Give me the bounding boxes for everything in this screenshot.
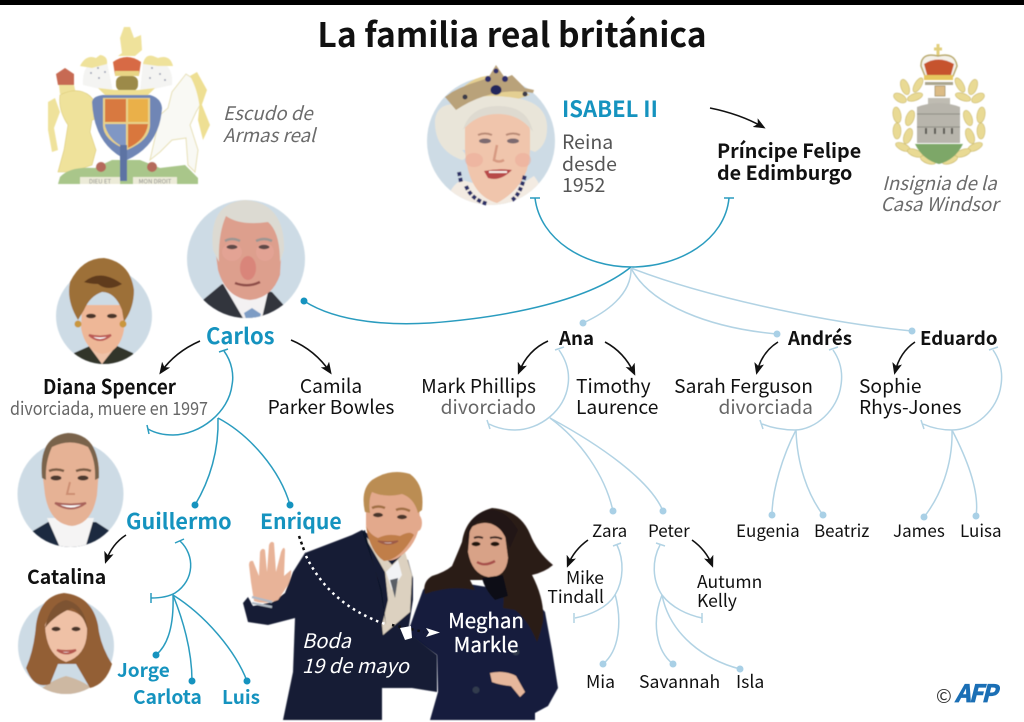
names: grandchildren row: Luisa — [960, 517, 1002, 542]
top bar — [0, 0, 1024, 5]
text: Mark Phillips divorciado: Mark Phillips — [421, 371, 536, 399]
names: great-grandchildren row: Isla — [736, 669, 764, 694]
text: Reina desde 1952: Reina — [562, 126, 613, 155]
arrow: Peter to Autumn — [692, 540, 712, 565]
name: Timothy Laurence: Timothy — [576, 371, 651, 399]
arrow: Eduardo to Sophie — [895, 342, 915, 372]
name: Carlota: Carlota — [133, 682, 202, 710]
icon: royal coat of arms: DIEU ET — [89, 176, 112, 186]
names: grandchildren row: Beatriz — [814, 517, 869, 542]
name: ISABEL II: ISABEL II — [562, 92, 658, 124]
text: Insignia de la Casa Windsor: Insignia de la — [882, 169, 998, 196]
line: Mia descent — [600, 594, 619, 668]
names: great-grandchildren row: Savannah — [639, 669, 720, 694]
portrait: Isabel II — [427, 65, 555, 210]
arrow: Andrés to Sarah — [757, 342, 778, 372]
name: Timothy Laurence: Laurence — [576, 392, 658, 420]
text: Mark Phillips divorciado: divorciado — [441, 392, 536, 420]
name: Autumn Kelly: Autumn — [697, 569, 762, 594]
portrait: Diana — [56, 258, 152, 370]
arrow: Guillermo to Catalina — [106, 535, 126, 561]
names: grandchildren row: James — [893, 517, 945, 542]
credit: AFP: AFP — [954, 674, 1001, 709]
name: Sophie Rhys-Jones: Rhys-Jones — [859, 392, 961, 420]
name: Luis: Luis — [222, 683, 260, 710]
arrow: Ana to Mark Phillips — [519, 341, 548, 372]
arrow: Isabel to Felipe — [710, 108, 763, 127]
name: Meghan Markle: Markle — [454, 628, 518, 658]
portrait: Carlos — [187, 200, 305, 325]
name: Camila Parker Bowles: Camila — [300, 371, 362, 399]
name: Andrés: Andrés — [787, 324, 852, 351]
text: Boda 19 de mayo: Boda — [302, 625, 352, 654]
icon: royal coat of arms — [48, 27, 210, 186]
names: grandchildren row: Peter — [648, 517, 690, 542]
name: Jorge: Jorge — [117, 656, 170, 683]
credit: AFP — [936, 674, 1001, 709]
names: grandchildren row: Eugenia — [736, 517, 800, 542]
name: Sophie Rhys-Jones: Sophie — [859, 371, 922, 399]
marriage arc: Zara and Mike — [574, 543, 622, 623]
name: Carlos: Carlos — [206, 319, 275, 351]
text: Escudo de Armas real: Armas real — [223, 121, 318, 148]
portrait: Catalina — [18, 593, 114, 700]
marriage arc: Ana and Mark — [487, 347, 569, 430]
name: Enrique: Enrique — [260, 505, 342, 536]
marriage arc: Isabel and Felipe — [530, 198, 734, 267]
icon: royal coat of arms: MON DROIT — [139, 176, 172, 186]
name: Autumn Kelly: Kelly — [697, 588, 737, 613]
lines: James and Luisa descent — [920, 430, 980, 520]
name: Diana Spencer: Diana Spencer — [43, 371, 176, 400]
name: Mike Tindall: Mike — [566, 565, 604, 590]
lines: Zara and Peter descent — [550, 418, 666, 514]
dotted line: wedding link Enrique to Meghan — [299, 536, 440, 640]
names: grandchildren row: Zara — [592, 517, 627, 542]
marriage arc: Andrés and Sarah — [760, 347, 842, 430]
name: Camila Parker Bowles: Parker Bowles — [268, 392, 394, 420]
text: Boda 19 de mayo: 19 de mayo — [302, 650, 411, 679]
marriage arc: Peter and Autumn — [654, 543, 702, 623]
portrait: Guillermo — [18, 433, 124, 552]
name: Catalina: Catalina — [27, 561, 106, 590]
text: Escudo de Armas real: Escudo de — [223, 99, 314, 126]
name: Meghan Markle: Meghan — [448, 604, 524, 634]
text: divorciada, muere en 1997: divorciada, muere en 1997 — [10, 395, 208, 421]
marriage arc: Guillermo and Catalina — [151, 539, 191, 603]
name: Príncipe Felipe de Edimburgo: de Edimburgo — [717, 157, 852, 186]
marriage arc: Eduardo and Sophie — [921, 347, 1002, 430]
title: La familia real británica — [317, 8, 707, 57]
arrow: Carlos to Diana — [161, 341, 200, 372]
lines: Ana, Andrés, Eduardo descent — [580, 268, 916, 338]
photo: Meghan Markle — [408, 508, 558, 720]
name: Mike Tindall: Tindall — [547, 584, 604, 609]
name: Ana: Ana — [558, 324, 594, 351]
credit: AFP: © — [936, 682, 952, 709]
text: Sarah Ferguson divorciada: divorciada — [718, 392, 813, 420]
lines: Jorge, Carlota, Luis descent — [152, 595, 250, 684]
arrow: Ana to Timothy Laurence — [605, 342, 634, 373]
icon: House of Windsor badge — [892, 44, 986, 166]
text: Sarah Ferguson divorciada: Sarah Ferguson — [674, 371, 813, 399]
names: great-grandchildren row: Mia — [586, 669, 615, 694]
name: Príncipe Felipe de Edimburgo: Príncipe Felipe — [717, 135, 861, 164]
name: Eduardo: Eduardo — [920, 324, 998, 351]
lines: Guillermo and Enrique descent — [192, 418, 294, 508]
text: Reina desde 1952: 1952 — [562, 169, 605, 198]
photo: Enrique (Harry) — [243, 472, 437, 720]
arrow: Zara to Mike — [568, 540, 588, 565]
text: Insignia de la Casa Windsor: Casa Windsor — [881, 190, 1001, 217]
marriage arc: Carlos and Diana — [147, 349, 233, 435]
name: Guillermo: Guillermo — [126, 505, 232, 536]
arrow: Carlos to Camila — [291, 340, 330, 372]
line: Carlos descent — [300, 267, 631, 324]
lines: Eugenia and Beatriz descent — [768, 430, 826, 518]
text: Reina desde 1952: desde — [562, 148, 617, 177]
lines: Savannah and Isla descent — [656, 595, 744, 672]
